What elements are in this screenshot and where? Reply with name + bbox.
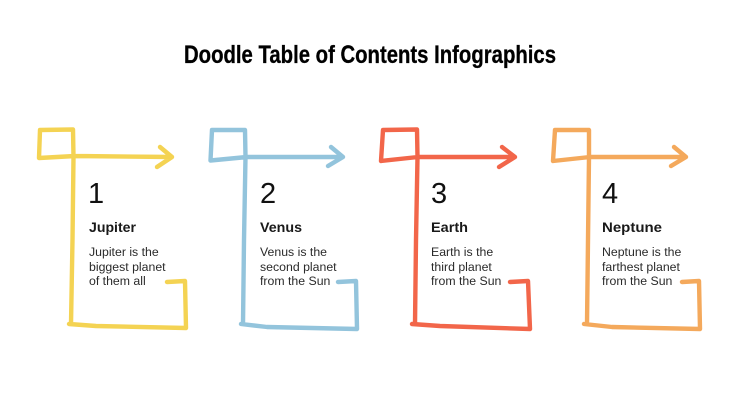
description: Jupiter: of them all bbox=[89, 274, 146, 288]
description: Earth: third planet bbox=[431, 260, 492, 274]
description: Earth: Earth is the bbox=[431, 245, 493, 259]
panel: Venus bbox=[210, 130, 357, 329]
heading: Earth: Earth bbox=[431, 219, 468, 235]
heading: Venus: Venus bbox=[260, 219, 302, 235]
doodle frame and arrow: yellow bbox=[39, 130, 186, 328]
doodle frame and arrow: red bbox=[381, 130, 530, 329]
number 1: 1 bbox=[88, 178, 104, 210]
description: Earth: from the Sun bbox=[431, 274, 502, 288]
panel: Earth bbox=[381, 130, 530, 329]
description: Neptune: farthest planet bbox=[602, 260, 681, 274]
description: Venus: from the Sun bbox=[260, 274, 331, 288]
doodle frame and arrow: orange bbox=[553, 130, 700, 329]
description: Jupiter: Jupiter is the bbox=[89, 245, 159, 259]
description: Venus: Venus is the bbox=[260, 245, 327, 259]
panel: Jupiter bbox=[39, 130, 186, 328]
number 2: 2 bbox=[260, 178, 276, 210]
panel: Neptune bbox=[553, 130, 700, 329]
heading: Neptune: Neptune bbox=[602, 219, 662, 235]
doodle frame and arrow: blue bbox=[210, 130, 357, 329]
number 4: 4 bbox=[602, 178, 618, 210]
description: Neptune: Neptune is the bbox=[602, 245, 681, 259]
description: Neptune: from the Sun bbox=[602, 274, 673, 288]
heading: Jupiter: Jupiter bbox=[89, 219, 137, 235]
description: Jupiter: biggest planet bbox=[89, 260, 166, 274]
number 3: 3 bbox=[431, 178, 447, 210]
title: Doodle Table of Contents Infographics bbox=[184, 41, 556, 69]
description: Venus: second planet bbox=[260, 260, 337, 274]
